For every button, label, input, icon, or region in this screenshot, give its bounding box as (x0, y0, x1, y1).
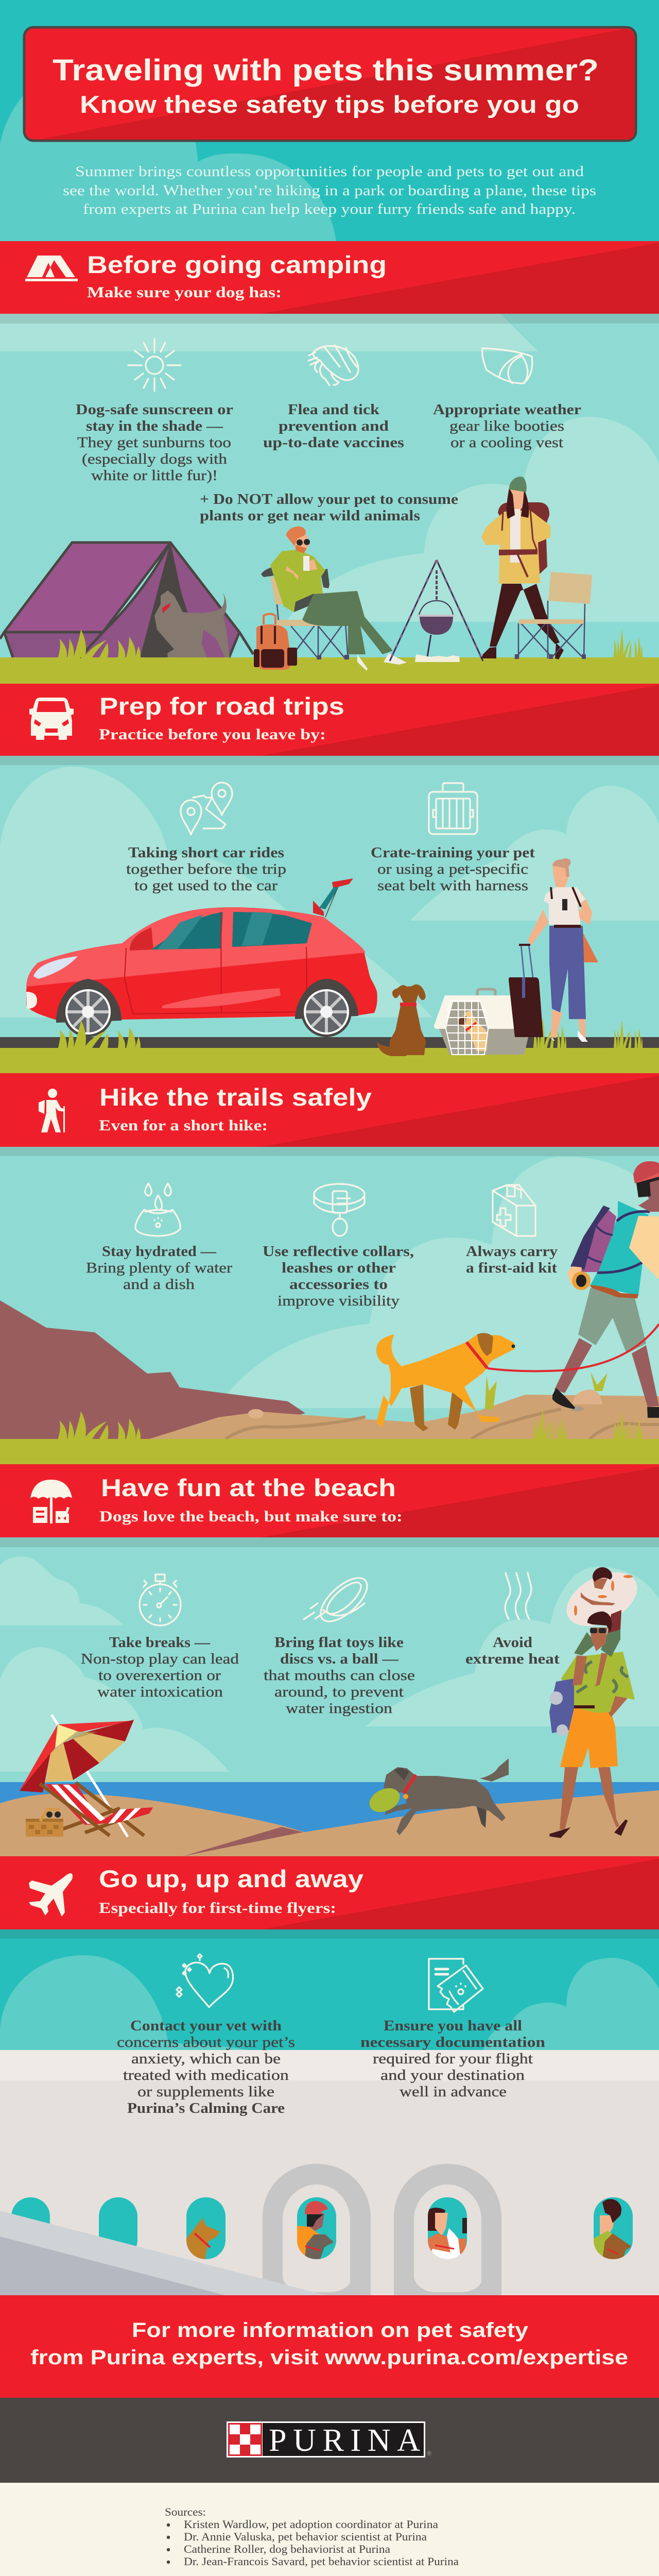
illustration: man with child on shoulders (549, 1561, 646, 1837)
icon: documents and ticket (429, 1959, 483, 2012)
section header: road trips (0, 684, 659, 756)
text: documentation (360, 2018, 545, 2100)
illustration: grey dog at tent (154, 590, 230, 657)
text: flat toys (264, 1634, 415, 1717)
text: first aid kit: a first-aid kit (466, 1260, 557, 1276)
text: short car rides (126, 844, 286, 894)
text: stay hydrated: and a dish (123, 1276, 195, 1293)
illustration: man in chair with drink (261, 527, 407, 671)
text: contact your vet (117, 2018, 295, 2116)
text: sunscreen: white or little fur)! (91, 467, 218, 484)
text: flat toys: discs vs. a ball — (280, 1651, 399, 1667)
text: reflective collars: accessories to (289, 1276, 388, 1293)
text: crate training: or using a pet-specific (377, 861, 528, 877)
logo: Purina: PURINA (269, 2423, 420, 2458)
illustration: hiker with backpack (552, 1161, 659, 1418)
text: reflective collars: Use reflective collars, (263, 1243, 414, 1260)
text: crate training: Crate-training your pet (371, 844, 535, 861)
icon: first aid kit (493, 1185, 535, 1236)
section header: go up up and away: Go up, up and away (99, 1865, 363, 1892)
text: first aid kit (466, 1243, 558, 1276)
text: crate training: seat belt with harness (377, 877, 528, 894)
text: documentation: Ensure you have all (384, 2018, 522, 2034)
illustration: brown dog sitting (377, 985, 426, 1056)
text: take breaks: Non-stop play can lead (81, 1651, 239, 1667)
icon: airplane (29, 1873, 73, 1917)
panel: camping scene background (0, 314, 659, 684)
illustration: window frames (263, 2164, 501, 2295)
illustration: hiking woman (481, 477, 564, 659)
panel: beach background (0, 1537, 659, 1856)
text: sunscreen: stay in the shade — (86, 418, 223, 434)
text: contact your vet: anxiety, which can be (131, 2050, 281, 2067)
icon: stopwatch (140, 1574, 181, 1625)
text: take breaks: water intoxication (97, 1684, 223, 1700)
icon: sun (128, 339, 181, 391)
icon: flea (308, 345, 358, 385)
text: stay hydrated: Bring plenty of water (86, 1260, 232, 1276)
text: flea and tick: up-to-date vaccines (263, 434, 404, 451)
intro text: from experts at Purina can help keep your furry friends safe and happy. (83, 201, 576, 217)
footer call to action: For more information on pet safety (132, 2319, 529, 2342)
text: weather gear: Appropriate weather (433, 401, 581, 418)
illustration: tent (0, 543, 253, 657)
text: weather gear (433, 401, 581, 451)
text: sunscreen: They get sunburns too (77, 434, 231, 451)
illustration: window with woman and brown dog (594, 2197, 633, 2259)
icon: heart with sparkles (177, 1954, 233, 2007)
illustration: dog with disc (366, 1758, 509, 1835)
text: short car rides: Taking short car rides (128, 844, 284, 861)
text: weather gear: gear like booties (449, 418, 564, 434)
panel: sources: Dr. Jean-Francois Savard, pet behavior scientist at Purina (184, 2555, 459, 2568)
text: contact your vet: concerns about your pet’s (117, 2034, 295, 2050)
title banner (24, 27, 636, 141)
text: take breaks: to overexertion or (98, 1667, 221, 1684)
section header: beach (0, 1464, 659, 1537)
logo: Purina: ® (427, 2450, 431, 2457)
panel: hiking background (0, 1147, 659, 1439)
icon: pet crate (429, 783, 477, 834)
illustration: beach umbrella (20, 1715, 134, 1837)
text: reflective collars: leashes or other (282, 1260, 396, 1276)
text: extreme heat: extreme heat (465, 1651, 560, 1667)
illustration: orange backpack (254, 614, 297, 670)
text: flat toys: that mouths can close (264, 1667, 415, 1684)
illustration: leash (488, 1324, 659, 1371)
text: flat toys: water ingestion (286, 1700, 393, 1717)
text: first aid kit: Always carry (466, 1243, 558, 1260)
illustration: orange dog on leash (376, 1333, 515, 1431)
illustration: woman with suitcase (509, 858, 598, 1042)
illustration: window with man and dog (297, 2197, 336, 2259)
text: short car rides: to get used to the car (134, 877, 278, 894)
icon: heat waves (505, 1573, 531, 1619)
text: sunscreen: Dog-safe sunscreen or (76, 401, 233, 418)
section header: road trips: Prep for road trips (99, 692, 344, 720)
text: weather gear: or a cooling vest (450, 434, 563, 451)
section header: road trips: Practice before you leave by: (99, 726, 326, 743)
icon: flying disc (304, 1570, 374, 1629)
illustration: deck chair and basket (26, 1783, 153, 1837)
illustration: right camp chair (515, 572, 592, 659)
section header: hike the trails (0, 1073, 659, 1147)
text: sunscreen: (especially dogs with (82, 451, 228, 467)
text: flat toys: Bring flat toys like (274, 1634, 404, 1651)
footer call to action (0, 2295, 659, 2398)
intro text: see the world. Whether you’re hiking in a park or boarding a plane, these tips (63, 183, 596, 199)
text: crate training (371, 844, 535, 894)
icon: hiker (39, 1089, 65, 1132)
text: take breaks: Take breaks — (109, 1634, 211, 1651)
ground strip (0, 1439, 659, 1464)
text: wild animals warning: + Do NOT allow your pet to consume (200, 491, 458, 507)
icon: car (29, 698, 74, 740)
text: flat toys: around, to prevent (274, 1684, 404, 1700)
icon: water bowl (135, 1183, 180, 1236)
text: documentation: and your destination (380, 2067, 525, 2083)
footer call to action: from Purina experts, visit www.purina.com/expertise (30, 2346, 628, 2369)
section header: go up up and away: Especially for first-time flyers: (99, 1900, 336, 1917)
text: extreme heat: Avoid (493, 1634, 532, 1651)
icon: map pins route (181, 783, 232, 835)
text: flea and tick: Flea and tick (288, 401, 380, 418)
illustration: mountain and sandy trail (0, 1300, 659, 1439)
section header: hike the trails: Even for a short hike: (99, 1117, 268, 1134)
text: documentation: required for your flight (373, 2050, 533, 2067)
illustration: pet carrier with cat (434, 989, 534, 1055)
section header: before going camping: Before going camping (87, 251, 387, 278)
icon: tent (25, 256, 78, 281)
text: short car rides: together before the trip (126, 861, 286, 877)
title banner: Know these safety tips before you go (80, 91, 579, 118)
panel: sources: Catherine Roller, dog behaviorist at Purina (184, 2543, 390, 2555)
icon: cooling vest (482, 348, 532, 383)
text: contact your vet: or supplements like (137, 2083, 274, 2100)
illustration: grass tufts camp (58, 630, 643, 657)
section header: before going camping (0, 241, 659, 314)
illustration: window with woman and white dog (428, 2197, 467, 2259)
illustration: empty plane windows (11, 2197, 137, 2259)
section header: beach: Have fun at the beach (101, 1474, 396, 1501)
panel: sources (0, 2483, 659, 2576)
text: sunscreen (76, 401, 233, 484)
text: contact your vet: Purina’s Calming Care (127, 2100, 285, 2116)
illustration: campfire pot on tripod (390, 560, 483, 662)
illustration: red car (26, 878, 377, 1037)
illustration: grass tufts trail (58, 1409, 643, 1439)
panel: flight background (0, 1929, 659, 2295)
section header: go up up and away (0, 1856, 659, 1929)
section header: before going camping: Make sure your dog has: (87, 284, 282, 301)
intro text (63, 164, 596, 217)
title banner: Traveling with pets this summer? (53, 54, 599, 87)
icon: collar with tag (314, 1184, 365, 1236)
text: wild animals warning (200, 491, 458, 524)
text: documentation: well in advance (400, 2083, 507, 2100)
section header: hike the trails: Hike the trails safely (99, 1083, 372, 1111)
panel: logo band (0, 2398, 659, 2483)
icon: beach umbrella and chair (30, 1480, 72, 1523)
text: extreme heat (465, 1634, 560, 1667)
section header: beach: Dogs love the beach, but make sure to: (99, 1508, 403, 1525)
illustration: window with dog (186, 2197, 226, 2259)
panel: intro background (0, 0, 659, 242)
text: flea and tick: prevention and (279, 418, 389, 434)
text: take breaks (81, 1634, 239, 1700)
text: documentation: necessary documentation (360, 2034, 545, 2050)
intro text: Summer brings countless opportunities for people and pets to get out and (75, 164, 584, 180)
panel: road trip background (0, 756, 659, 1073)
illustration: plane wing (0, 2211, 330, 2295)
text: stay hydrated: Stay hydrated — (102, 1243, 217, 1260)
text: reflective collars: improve visibility (278, 1293, 400, 1309)
text: reflective collars (263, 1243, 414, 1309)
text: contact your vet: treated with medication (123, 2067, 289, 2083)
panel: sources: Kristen Wardlow, pet adoption coordinator at Purina (184, 2518, 438, 2531)
panel: sources: Dr. Annie Valuska, pet behavior scientist at Purina (184, 2530, 427, 2543)
text: contact your vet: Contact your vet with (130, 2018, 282, 2034)
illustration: grass tufts road (58, 1018, 643, 1048)
text: flea and tick (263, 401, 404, 451)
text: stay hydrated (86, 1243, 232, 1293)
panel: sources: Sources: (165, 2505, 206, 2518)
text: wild animals warning: plants or get near wild animals (200, 507, 420, 524)
